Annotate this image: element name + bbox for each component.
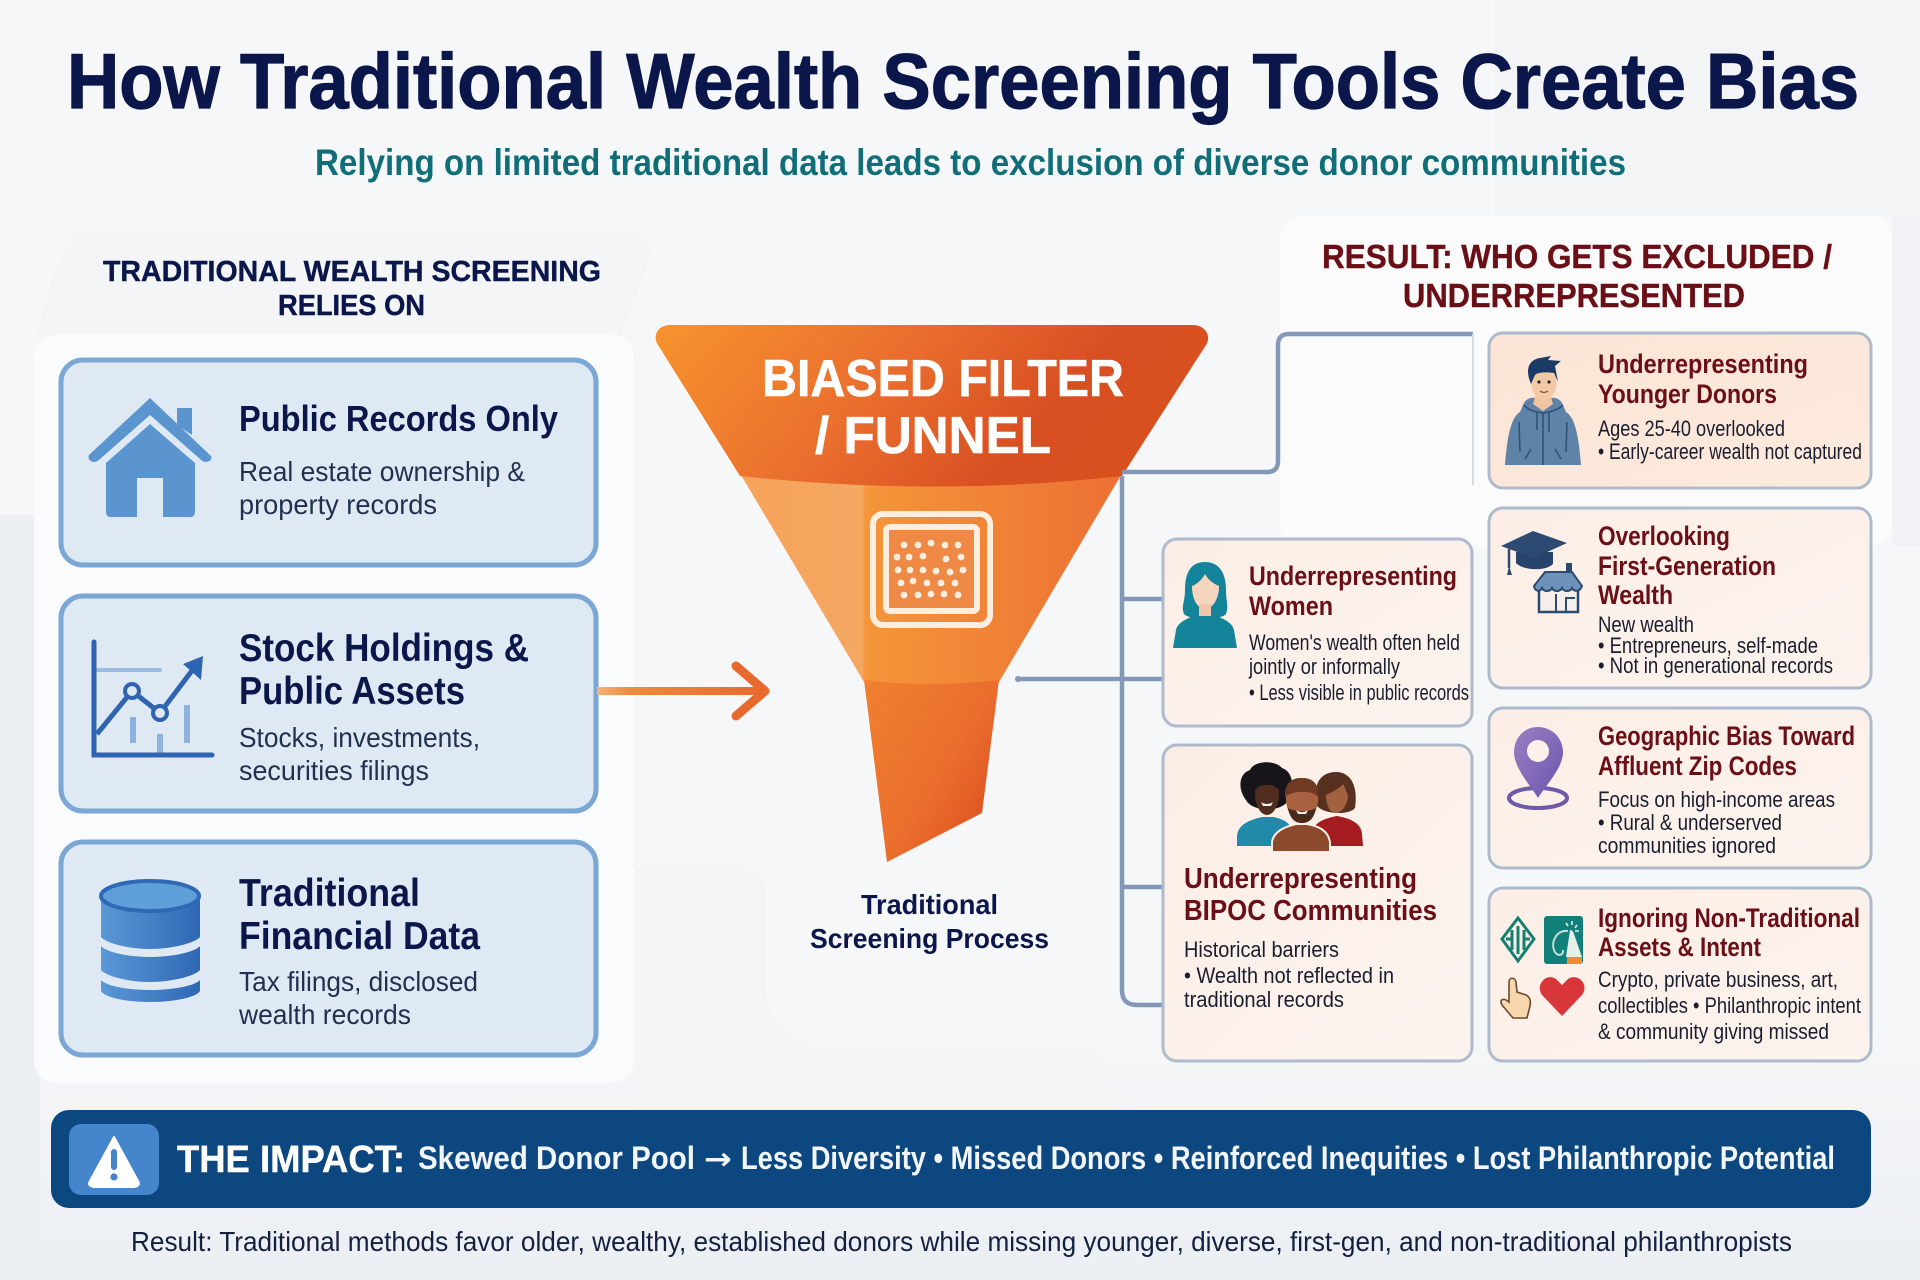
funnel [656, 325, 1208, 862]
text: BIPOC: Historical barriers [1184, 937, 1339, 962]
text: geographic bias: communities ignored [1598, 833, 1776, 858]
heading: who gets excluded: UNDERREPRESENTED [1403, 277, 1745, 314]
text: younger donors: Underrepresenting [1598, 349, 1808, 379]
icon: warning [69, 1124, 159, 1195]
panel: traditional wealth screening inputs [34, 234, 652, 1083]
arrow: inputs into funnel [597, 666, 765, 716]
text: first-generation: Overlooking [1598, 521, 1730, 551]
text: geographic bias [1598, 721, 1855, 858]
text: non-traditional: collectibles • Philanthropic intent [1598, 993, 1861, 1018]
text: traditional financial data: Tax filings, disclosed [239, 966, 478, 997]
text: women: jointly or informally [1248, 654, 1400, 679]
text: traditional financial data: wealth records [238, 999, 411, 1030]
funnel cone [738, 470, 1124, 686]
subtitle: Relying on limited traditional data leads to exclusion of diverse donor communities [315, 142, 1626, 183]
icon: crypto diamond [1502, 918, 1534, 961]
card: overlooking first-generation wealth [1489, 508, 1871, 688]
icon: house [88, 398, 211, 517]
icon: filter mesh [873, 514, 990, 625]
funnel caption: Screening Process [810, 923, 1049, 954]
icon: stock chart [94, 642, 212, 755]
text: stock holdings: Stock Holdings & [239, 627, 529, 670]
text: non-traditional: Ignoring Non-Traditional [1598, 903, 1860, 933]
card: underrepresenting women [1163, 539, 1472, 726]
text: BIPOC: • Wealth not reflected in [1184, 963, 1394, 988]
text: traditional financial data: Financial Data [239, 915, 480, 958]
text: stock holdings [239, 627, 529, 786]
text: younger donors [1598, 349, 1862, 464]
connector lines [1015, 334, 1473, 1005]
text: first-generation: First-Generation [1598, 551, 1776, 581]
heading: who gets excluded [1322, 238, 1832, 314]
text: women: • Less visible in public records [1249, 680, 1469, 705]
funnel label [762, 350, 1124, 465]
text: impact lead: Skewed Donor Pool [418, 1140, 695, 1176]
text: stock holdings: Stocks, investments, [239, 722, 480, 753]
icon: woman [1173, 562, 1237, 648]
icon: group of people [1237, 762, 1363, 852]
funnel label: BIASED FILTER [762, 350, 1124, 408]
text: BIPOC [1184, 863, 1437, 1012]
card: geographic bias [1489, 708, 1871, 868]
text: first-generation: Wealth [1598, 580, 1673, 610]
footer result note: Result: Traditional methods favor older, wealthy, established donors while missing younger, diverse, first-gen, and non-traditional philanthropists [131, 1226, 1792, 1257]
card: underrepresenting younger donors [1489, 333, 1871, 488]
card: traditional financial data [61, 842, 596, 1055]
heading: relies on: RELIES ON [278, 290, 425, 322]
arrow glyph: → [704, 1142, 732, 1177]
text: women [1248, 561, 1469, 705]
impact banner [51, 1110, 1871, 1208]
icon: hand [1501, 978, 1530, 1018]
text: first-generation: • Entrepreneurs, self-made [1598, 633, 1818, 658]
text: younger donors: Younger Donors [1598, 379, 1777, 409]
heading: who gets excluded: RESULT: WHO GETS EXCLUDED / [1322, 238, 1832, 275]
funnel caption: Traditional [861, 889, 998, 920]
icon: graduation cap and storefront [1501, 531, 1582, 612]
funnel label: / FUNNEL [815, 407, 1051, 465]
funnel spout [864, 680, 999, 862]
text: first-generation: • Not in generational records [1598, 653, 1833, 678]
card: ignoring non-traditional assets [1489, 888, 1871, 1061]
icon: young man in hoodie [1505, 356, 1581, 465]
text: geographic bias: Geographic Bias Toward [1598, 721, 1855, 751]
card: underrepresenting BIPOC communities [1163, 745, 1472, 1061]
text: women: Women's wealth often held [1249, 630, 1460, 655]
text: stock holdings: securities filings [239, 755, 429, 786]
text: public records only [239, 398, 558, 520]
icon: heart [1540, 977, 1585, 1016]
text: the impact: THE IMPACT: [177, 1139, 405, 1181]
text: BIPOC: BIPOC Communities [1184, 895, 1437, 927]
heading: relies on: TRADITIONAL WEALTH SCREENING [103, 256, 601, 288]
text: public records only: Public Records Only [239, 398, 558, 439]
text: non-traditional: Crypto, private business, art, [1598, 967, 1838, 992]
text: geographic bias: • Rural & underserved [1598, 810, 1782, 835]
text: first-generation: New wealth [1598, 612, 1694, 637]
text: public records only: Real estate ownership & [239, 456, 525, 487]
text: geographic bias: Affluent Zip Codes [1598, 751, 1797, 781]
text: traditional financial data [238, 872, 480, 1030]
heading: relies on [103, 256, 601, 322]
text: public records only: property records [239, 489, 437, 520]
text: younger donors: • Early-career wealth not captured [1598, 439, 1862, 464]
text: non-traditional [1598, 903, 1861, 1044]
text: non-traditional: & community giving missed [1598, 1019, 1829, 1044]
icon: map pin [1509, 727, 1567, 808]
text: BIPOC: Underrepresenting [1184, 863, 1417, 895]
card: public records only [61, 360, 596, 565]
text: stock holdings: Public Assets [239, 670, 465, 713]
text: women: Underrepresenting [1249, 561, 1457, 591]
text: non-traditional: Assets & Intent [1598, 932, 1761, 962]
funnel rim [656, 325, 1208, 486]
text: BIPOC: traditional records [1184, 987, 1344, 1012]
text: younger donors: Ages 25-40 overlooked [1598, 416, 1785, 441]
funnel caption [810, 889, 1049, 954]
panel: result header backdrop [1280, 216, 1892, 546]
icon: database [101, 881, 200, 1002]
icon: art tile [1544, 916, 1583, 964]
card: stock holdings [61, 596, 596, 811]
text: traditional financial data: Traditional [239, 872, 420, 915]
text: first-generation [1598, 521, 1833, 678]
text: geographic bias: Focus on high-income areas [1598, 787, 1835, 812]
text: women: Women [1249, 591, 1333, 621]
